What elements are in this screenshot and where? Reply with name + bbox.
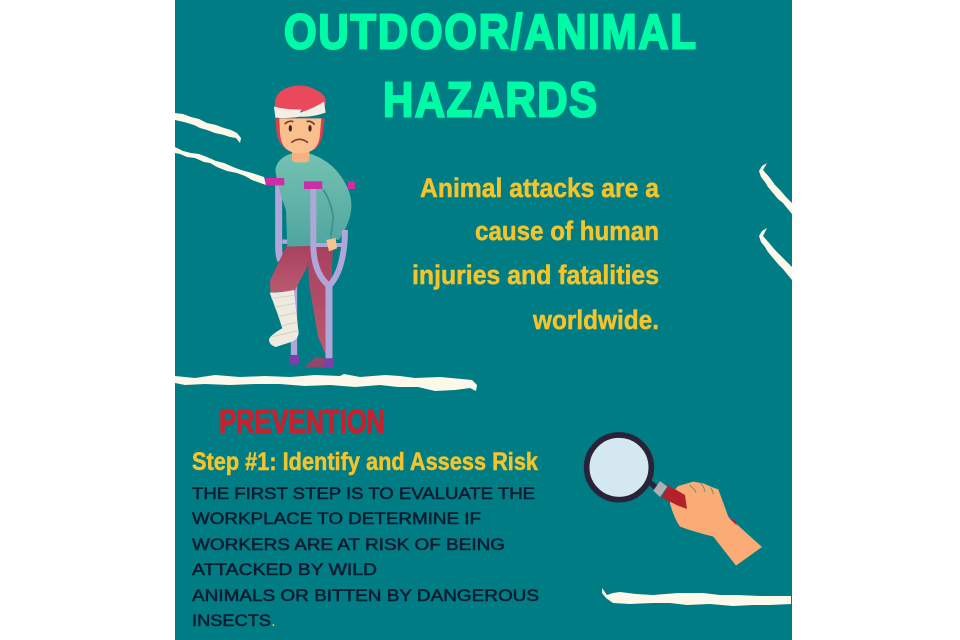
magnifier neck (649, 482, 657, 489)
standing foot (304, 357, 326, 368)
right crutch (313, 188, 345, 360)
step body text: WORKPLACE TO DETERMINE IF (192, 509, 481, 528)
step body text (192, 484, 539, 630)
intro text: injuries and fatalities (412, 260, 659, 290)
title: HAZARDS (383, 71, 597, 127)
heading: prevention: PREVENTION (219, 403, 385, 441)
crutch pads (266, 178, 355, 189)
step body text: ANIMALS OR BITTEN BY DANGEROUS (192, 586, 539, 605)
intro text: cause of human (475, 216, 659, 246)
finger lines (689, 483, 713, 494)
arm shading (323, 190, 333, 237)
shirt (275, 153, 351, 247)
leg cast (269, 290, 299, 347)
eyes and mouth (285, 121, 315, 143)
head bandage (274, 102, 326, 118)
step heading: Step #1: Identify and Assess Risk (192, 448, 538, 476)
magnifier lens (587, 435, 651, 500)
right leg (307, 245, 333, 357)
face (279, 118, 321, 153)
handle end (729, 518, 737, 525)
panel: teal background (175, 0, 792, 640)
step body text: THE FIRST STEP IS TO EVALUATE THE (192, 484, 535, 503)
handle (662, 485, 687, 509)
decorative torn brush strokes (175, 113, 792, 606)
ferrule (653, 481, 667, 497)
hand (326, 238, 337, 251)
icon: hand holding magnifying glass (587, 435, 762, 566)
neck (292, 148, 309, 162)
step body text: ATTACKED BY WILD (192, 560, 377, 579)
illustration: injured man on crutches (266, 85, 355, 368)
title: OUTDOOR/ANIMAL (284, 3, 696, 59)
intro text: Animal attacks are a (420, 173, 660, 203)
step body text: INSECTS (192, 611, 271, 630)
step body text: WORKERS ARE AT RISK OF BEING (192, 535, 505, 554)
intro text (412, 173, 660, 335)
sideburns (275, 118, 325, 150)
hand (670, 482, 762, 566)
hair (275, 85, 326, 112)
step body text: . (271, 611, 276, 630)
intro text: worldwide. (532, 305, 659, 335)
crutch feet (289, 355, 334, 368)
left crutch (279, 185, 294, 357)
title (284, 3, 696, 127)
left thigh (270, 244, 310, 293)
